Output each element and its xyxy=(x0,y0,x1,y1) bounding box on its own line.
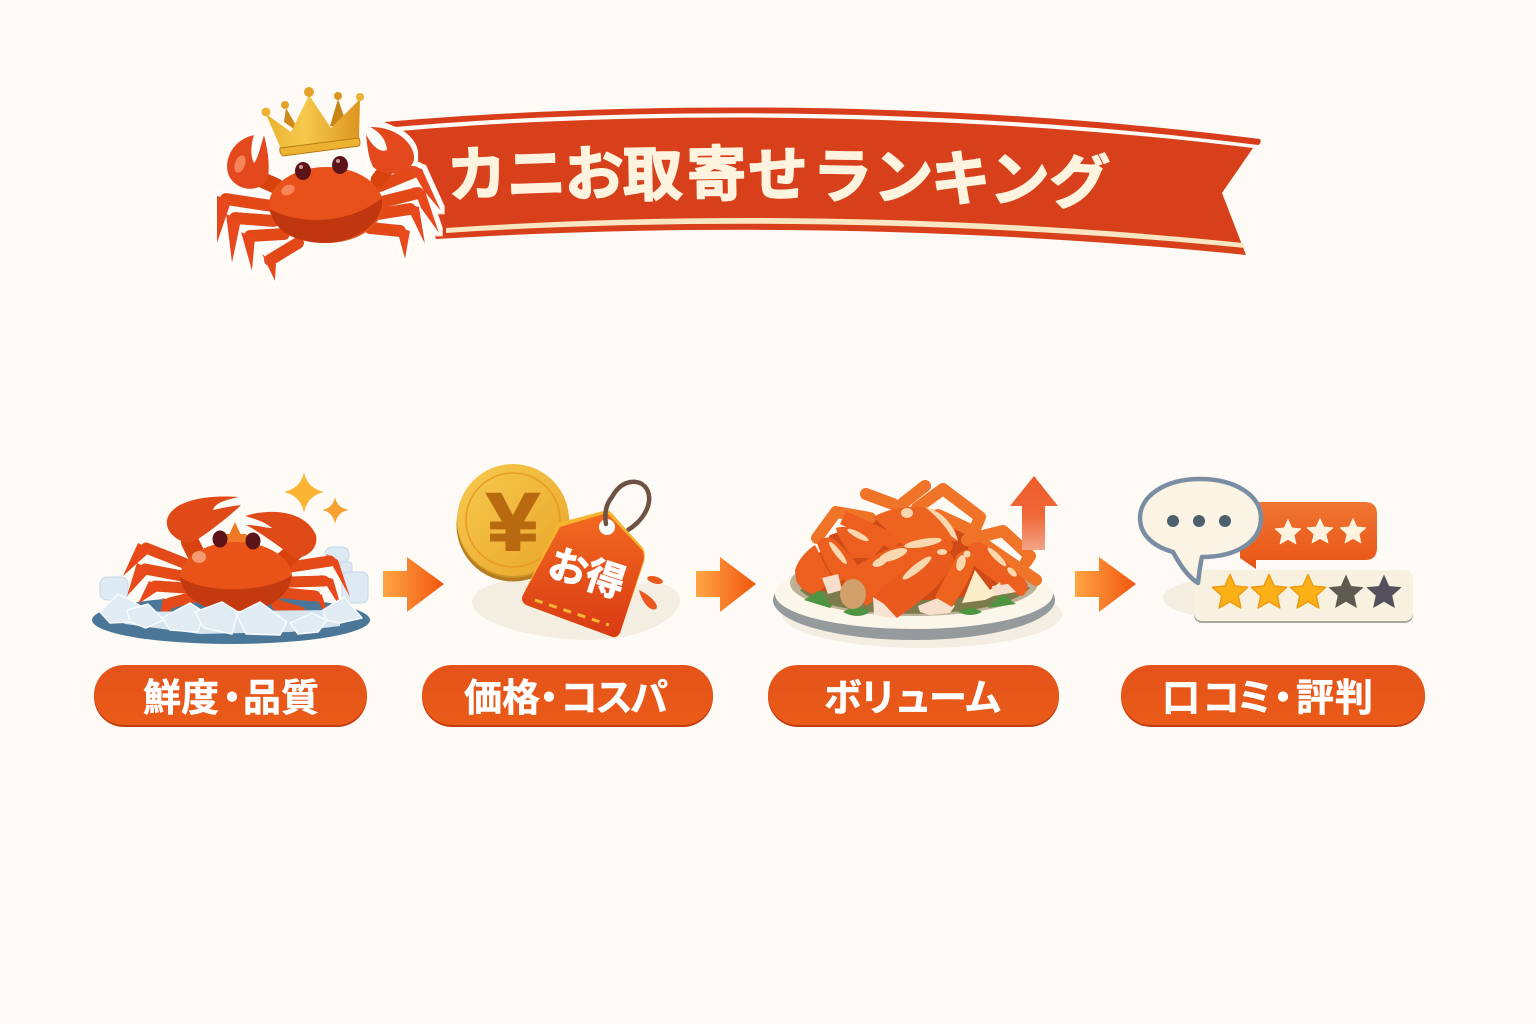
thin legs xyxy=(817,486,1036,580)
leg highlights xyxy=(827,508,1018,582)
price tag: お得 xyxy=(543,542,630,607)
icon: coin and price tag xyxy=(456,464,680,640)
meat pieces xyxy=(822,570,1016,615)
cream rating box xyxy=(1194,570,1413,623)
orange rating box xyxy=(1240,502,1377,569)
label pill: reviews xyxy=(1121,665,1425,727)
cut ends xyxy=(840,579,866,609)
icon: crab on ice xyxy=(92,472,370,644)
label pill: volume xyxy=(768,665,1059,727)
price tag xyxy=(522,497,645,637)
label pill: freshness: 鮮度・品質 xyxy=(143,678,319,720)
sparkles xyxy=(284,472,349,524)
icon: speech bubble and star ratings xyxy=(1140,479,1413,623)
dark leg mass xyxy=(806,518,1028,600)
volume up arrow xyxy=(1010,476,1058,550)
crab legs xyxy=(145,542,330,612)
crab eyes xyxy=(295,156,348,180)
splashes xyxy=(639,575,664,610)
label pill: volume: ボリューム xyxy=(824,678,1002,720)
front leg pieces xyxy=(842,539,975,618)
icon: crown xyxy=(262,87,364,156)
title banner xyxy=(384,107,1261,255)
front ice xyxy=(100,594,362,635)
label pill: reviews: 口コミ・評判 xyxy=(1162,678,1373,720)
label pill: price xyxy=(422,665,713,727)
speech bubble xyxy=(1140,479,1261,583)
banner ribbon xyxy=(384,107,1261,255)
arrow: second step xyxy=(696,557,756,612)
coin: ¥ xyxy=(487,476,539,568)
plate shadow xyxy=(782,580,1062,648)
crab body xyxy=(180,522,292,612)
right leg piece xyxy=(968,542,1027,596)
left leg pieces xyxy=(795,511,904,594)
plate xyxy=(773,560,1055,640)
top big leg xyxy=(873,507,958,547)
label pill: price: 価格・コスパ xyxy=(464,678,668,720)
coin xyxy=(456,464,570,582)
icon: plate of crab legs xyxy=(773,476,1062,648)
crab body xyxy=(269,167,383,243)
crab eyes xyxy=(212,530,260,550)
icon: crowned crab xyxy=(217,87,441,281)
arrow: first step xyxy=(383,557,444,612)
column: reviews and reputation xyxy=(1121,479,1425,727)
arrow: third step xyxy=(1075,557,1136,612)
back ice xyxy=(100,547,368,603)
column: freshness and quality xyxy=(92,472,370,727)
ground shadow xyxy=(472,581,680,640)
string behind tag xyxy=(612,482,649,530)
column: price and value xyxy=(422,464,713,727)
crab legs and claws xyxy=(217,127,441,281)
ice plate xyxy=(92,596,370,644)
ground shadow xyxy=(1163,578,1287,618)
crab claws xyxy=(167,497,241,543)
banner title text: カニお取寄せランキング xyxy=(445,140,1111,218)
column: volume xyxy=(768,476,1062,727)
greens xyxy=(804,590,1016,616)
label pill: freshness xyxy=(94,665,367,727)
